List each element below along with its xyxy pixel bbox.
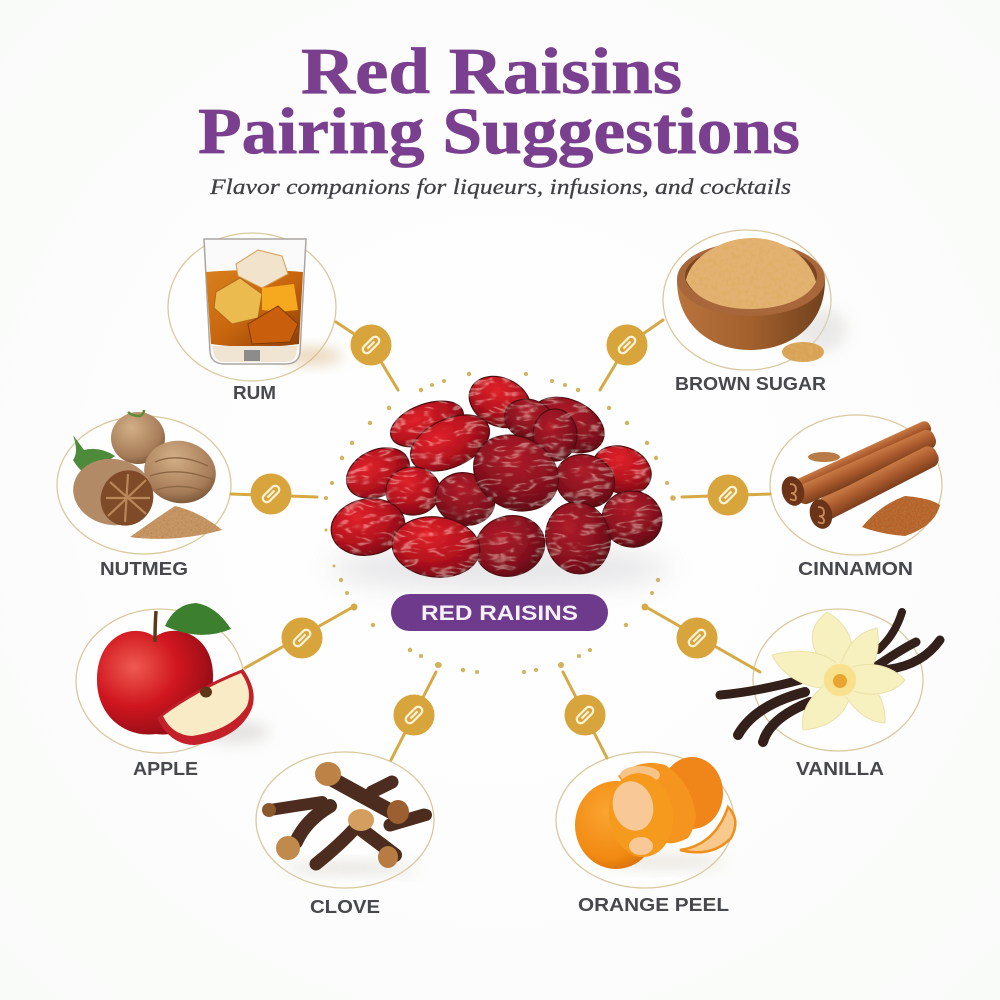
icon: vanilla pods xyxy=(720,612,940,742)
icon: vanilla flower xyxy=(772,612,905,730)
connector: vanilla xyxy=(642,604,760,672)
icon: glass of rum xyxy=(204,239,306,364)
item: vanilla xyxy=(720,609,940,751)
label: nutmeg: NUTMEG xyxy=(100,559,188,579)
dotted halo around raisins xyxy=(324,372,676,674)
icon: cloves xyxy=(262,762,432,868)
item: orange peel xyxy=(556,752,735,888)
icon: cinnamon powder xyxy=(862,496,940,536)
icon: orange and spiral peel xyxy=(575,757,735,869)
label: brown sugar: BROWN SUGAR xyxy=(675,374,826,394)
item: rum xyxy=(168,233,342,381)
connector: brown sugar xyxy=(600,320,663,390)
item: cinnamon xyxy=(770,415,942,555)
label: cinnamon: CINNAMON xyxy=(798,559,913,579)
connector: rum xyxy=(336,322,398,390)
icon: nutmeg powder xyxy=(130,506,222,539)
connector: cinnamon xyxy=(682,474,770,516)
item: apple xyxy=(76,603,269,753)
icon: sugar pile xyxy=(782,342,824,362)
title: Pairing Suggestions xyxy=(198,95,800,168)
subtitle: Flavor companions for liqueurs, infusions, and cocktails xyxy=(209,174,791,199)
label: apple: APPLE xyxy=(133,759,198,779)
icon: stem xyxy=(155,611,156,642)
icon: apple slice xyxy=(157,669,254,745)
hero: red raisins pile xyxy=(327,367,670,588)
item: nutmeg xyxy=(57,410,231,554)
center pill label: RED RAISINS xyxy=(421,602,578,625)
item: brown sugar xyxy=(663,230,846,370)
icon: leaf xyxy=(165,603,231,635)
connector: orange peel xyxy=(558,662,607,758)
icon: whole nutmegs xyxy=(68,410,222,534)
title: Red Raisins xyxy=(301,35,682,108)
label: clove: CLOVE xyxy=(310,897,380,917)
label: orange peel: ORANGE PEEL xyxy=(578,895,729,915)
title xyxy=(198,35,800,168)
label: vanilla: VANILLA xyxy=(796,759,884,779)
icon: leaf xyxy=(73,435,115,474)
connector: clove xyxy=(391,662,441,760)
icon: cinnamon sticks xyxy=(778,419,942,531)
label: rum: RUM xyxy=(233,383,276,403)
icon: red apple xyxy=(97,631,213,734)
center pill label xyxy=(391,594,608,631)
connector: nutmeg xyxy=(231,474,317,514)
item: clove xyxy=(256,752,434,888)
icon: wooden bowl of sugar xyxy=(677,238,825,350)
connector: apple xyxy=(245,604,358,668)
